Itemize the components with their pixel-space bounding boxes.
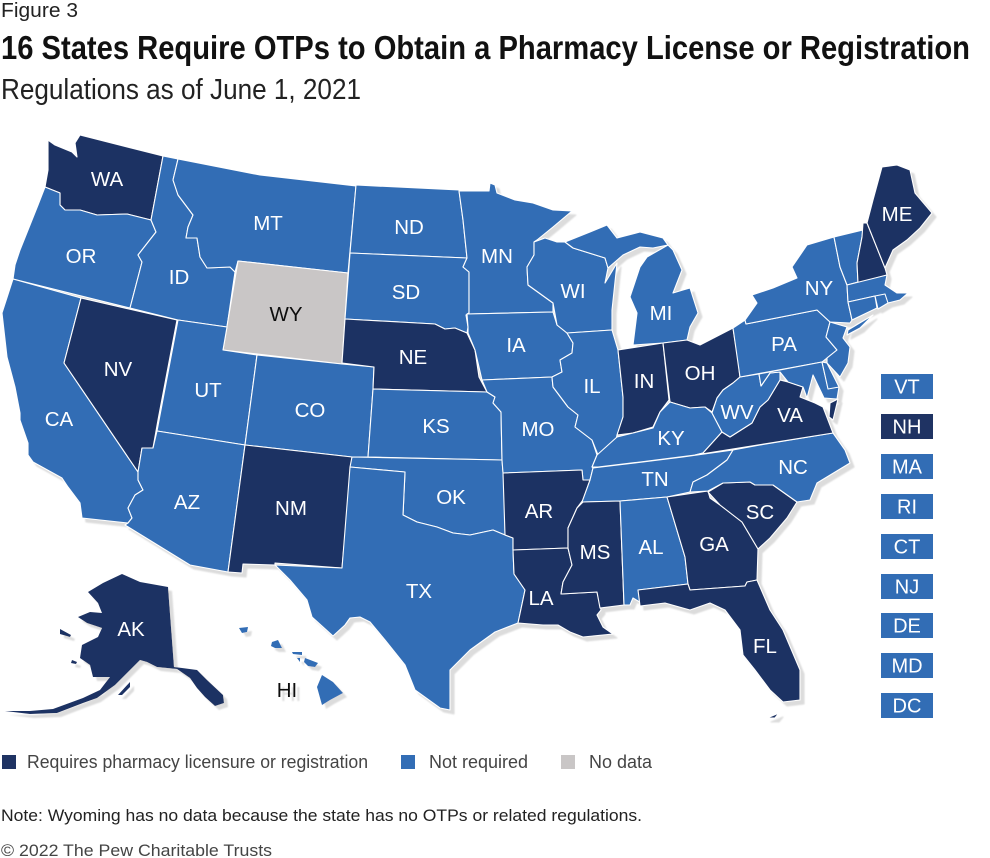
state: Illinois: IL	[583, 375, 601, 398]
state: Wyoming (no data)	[223, 261, 348, 364]
key: NJ: NJ	[895, 576, 919, 598]
state: Montana: MT	[253, 212, 283, 235]
state: Florida: FL	[753, 635, 777, 658]
state: Pennsylvania: PA	[771, 333, 797, 356]
state: California: CA	[45, 408, 74, 431]
state: Oregon	[13, 187, 156, 308]
state: South Carolina: SC	[746, 501, 774, 524]
state: Kentucky	[592, 402, 722, 467]
figure label: Figure 3	[1, 0, 78, 22]
state: Iowa: IA	[506, 334, 526, 357]
state: Florida	[638, 580, 800, 718]
key: MD: MD	[891, 656, 923, 678]
state: Washington	[45, 135, 163, 220]
state: Arizona	[125, 431, 245, 572]
state: Connecticut	[848, 296, 877, 320]
state: Kansas	[368, 389, 502, 460]
state: Wyoming (no data): WY	[269, 303, 303, 326]
state: Alabama: AL	[638, 536, 664, 559]
state: New Hampshire	[857, 223, 887, 283]
state: New Jersey	[826, 322, 850, 377]
state: Colorado	[245, 355, 374, 457]
state: Alabama	[620, 497, 688, 605]
state: New York: NY	[805, 277, 834, 300]
state: Oklahoma	[350, 457, 505, 535]
state: California	[2, 279, 143, 523]
key: MD	[881, 653, 933, 678]
state: South Carolina	[708, 482, 797, 549]
legend: not required: Not required	[429, 752, 528, 772]
state: New Mexico	[228, 445, 352, 573]
state: Massachusetts	[847, 275, 908, 303]
state: South Dakota: SD	[392, 281, 420, 304]
key: DE	[881, 613, 933, 638]
state: Minnesota	[459, 183, 572, 314]
key: DE: DE	[893, 616, 921, 638]
state: Idaho	[130, 156, 235, 327]
state: Utah	[157, 320, 257, 445]
state: Colorado: CO	[295, 399, 325, 422]
state: North Dakota: ND	[394, 216, 424, 239]
state: Kentucky: KY	[657, 427, 685, 450]
legend: no data: No data	[589, 752, 653, 772]
state: North Dakota	[350, 185, 467, 258]
state: Kansas: KS	[422, 415, 450, 438]
key: MA	[881, 454, 933, 479]
state: Arkansas: AR	[525, 500, 553, 523]
state: Georgia: GA	[699, 533, 729, 556]
key: CT: CT	[894, 536, 920, 558]
state: Nebraska: NE	[399, 346, 427, 369]
state: Michigan: MI	[650, 302, 672, 325]
state: Minnesota: MN	[481, 245, 513, 268]
state: Mississippi: MS	[580, 541, 610, 564]
state: Virginia: VA	[777, 404, 803, 427]
state: Louisiana: LA	[528, 587, 554, 610]
state: Missouri	[482, 377, 597, 480]
state: Georgia	[667, 491, 758, 590]
state: Wisconsin: WI	[560, 280, 586, 303]
state: Washington: WA	[91, 168, 123, 191]
state: Virginia	[695, 380, 838, 455]
state: Maine: ME	[882, 203, 912, 226]
state: Maryland	[759, 362, 839, 399]
state: Oregon: OR	[66, 245, 96, 268]
note: Note: Wyoming has no data because the state has no OTPs or related regulations.	[1, 806, 642, 825]
key: CT	[881, 534, 933, 559]
state: Indiana	[617, 343, 669, 435]
legend: no data	[561, 752, 653, 772]
key: RI: RI	[897, 496, 917, 518]
state: New Mexico: NM	[275, 497, 307, 520]
state: Maine	[867, 165, 932, 268]
key: DC	[881, 693, 933, 718]
state: Delaware	[822, 362, 839, 389]
key: VT: VT	[894, 376, 920, 398]
legend: requires licensure: Requires pharmacy licensure or registration	[27, 752, 368, 772]
key: VT	[881, 374, 933, 399]
legend	[2, 752, 653, 772]
state: Utah: UT	[194, 379, 222, 402]
key: NJ	[881, 574, 933, 599]
state: New York	[745, 237, 873, 335]
state: Texas: TX	[406, 580, 432, 603]
state: North Carolina	[690, 433, 850, 502]
state: Pennsylvania	[733, 310, 837, 377]
subtitle: Regulations as of June 1, 2021	[1, 74, 361, 106]
key: RI	[881, 494, 933, 519]
state: Michigan	[565, 225, 698, 345]
state: Nebraska	[342, 319, 487, 392]
state: Oklahoma: OK	[436, 486, 466, 509]
key: DC: DC	[893, 696, 921, 718]
state: Wisconsin	[527, 238, 617, 333]
map of the United States	[2, 135, 932, 718]
state: Rhode Island	[875, 294, 888, 309]
state: South Dakota	[345, 253, 469, 333]
state: Nevada: NV	[104, 358, 133, 381]
state: Ohio: OH	[685, 362, 715, 385]
state: Indiana: IN	[634, 370, 654, 393]
state: Ohio	[663, 328, 740, 412]
state: Tennessee: TN	[641, 468, 669, 491]
state: Illinois	[552, 330, 623, 455]
state: Tennessee	[582, 450, 733, 502]
state: Arkansas	[503, 470, 590, 550]
key: NH	[881, 414, 933, 439]
state: Louisiana	[513, 548, 613, 637]
state: Alaska: AK	[117, 618, 145, 641]
state: West Virginia	[712, 372, 780, 437]
state: Texas	[275, 467, 525, 710]
state: Mississippi	[561, 501, 624, 608]
key: MA: MA	[892, 456, 923, 478]
state: Alaska	[5, 574, 224, 714]
state: Vermont	[834, 230, 863, 285]
state: Arizona: AZ	[174, 491, 200, 514]
state: Nevada	[64, 298, 177, 472]
small-state key	[881, 374, 933, 718]
state: North Carolina: NC	[778, 456, 808, 479]
label: Hawaii: HI	[277, 679, 297, 702]
state: Idaho: ID	[169, 266, 189, 289]
key: NH: NH	[893, 416, 921, 438]
state: Missouri: MO	[521, 418, 555, 441]
state: Hawaii	[239, 627, 343, 705]
state: West Virginia: WV	[720, 401, 754, 424]
state: Iowa	[467, 312, 573, 380]
state: Montana	[173, 159, 356, 273]
